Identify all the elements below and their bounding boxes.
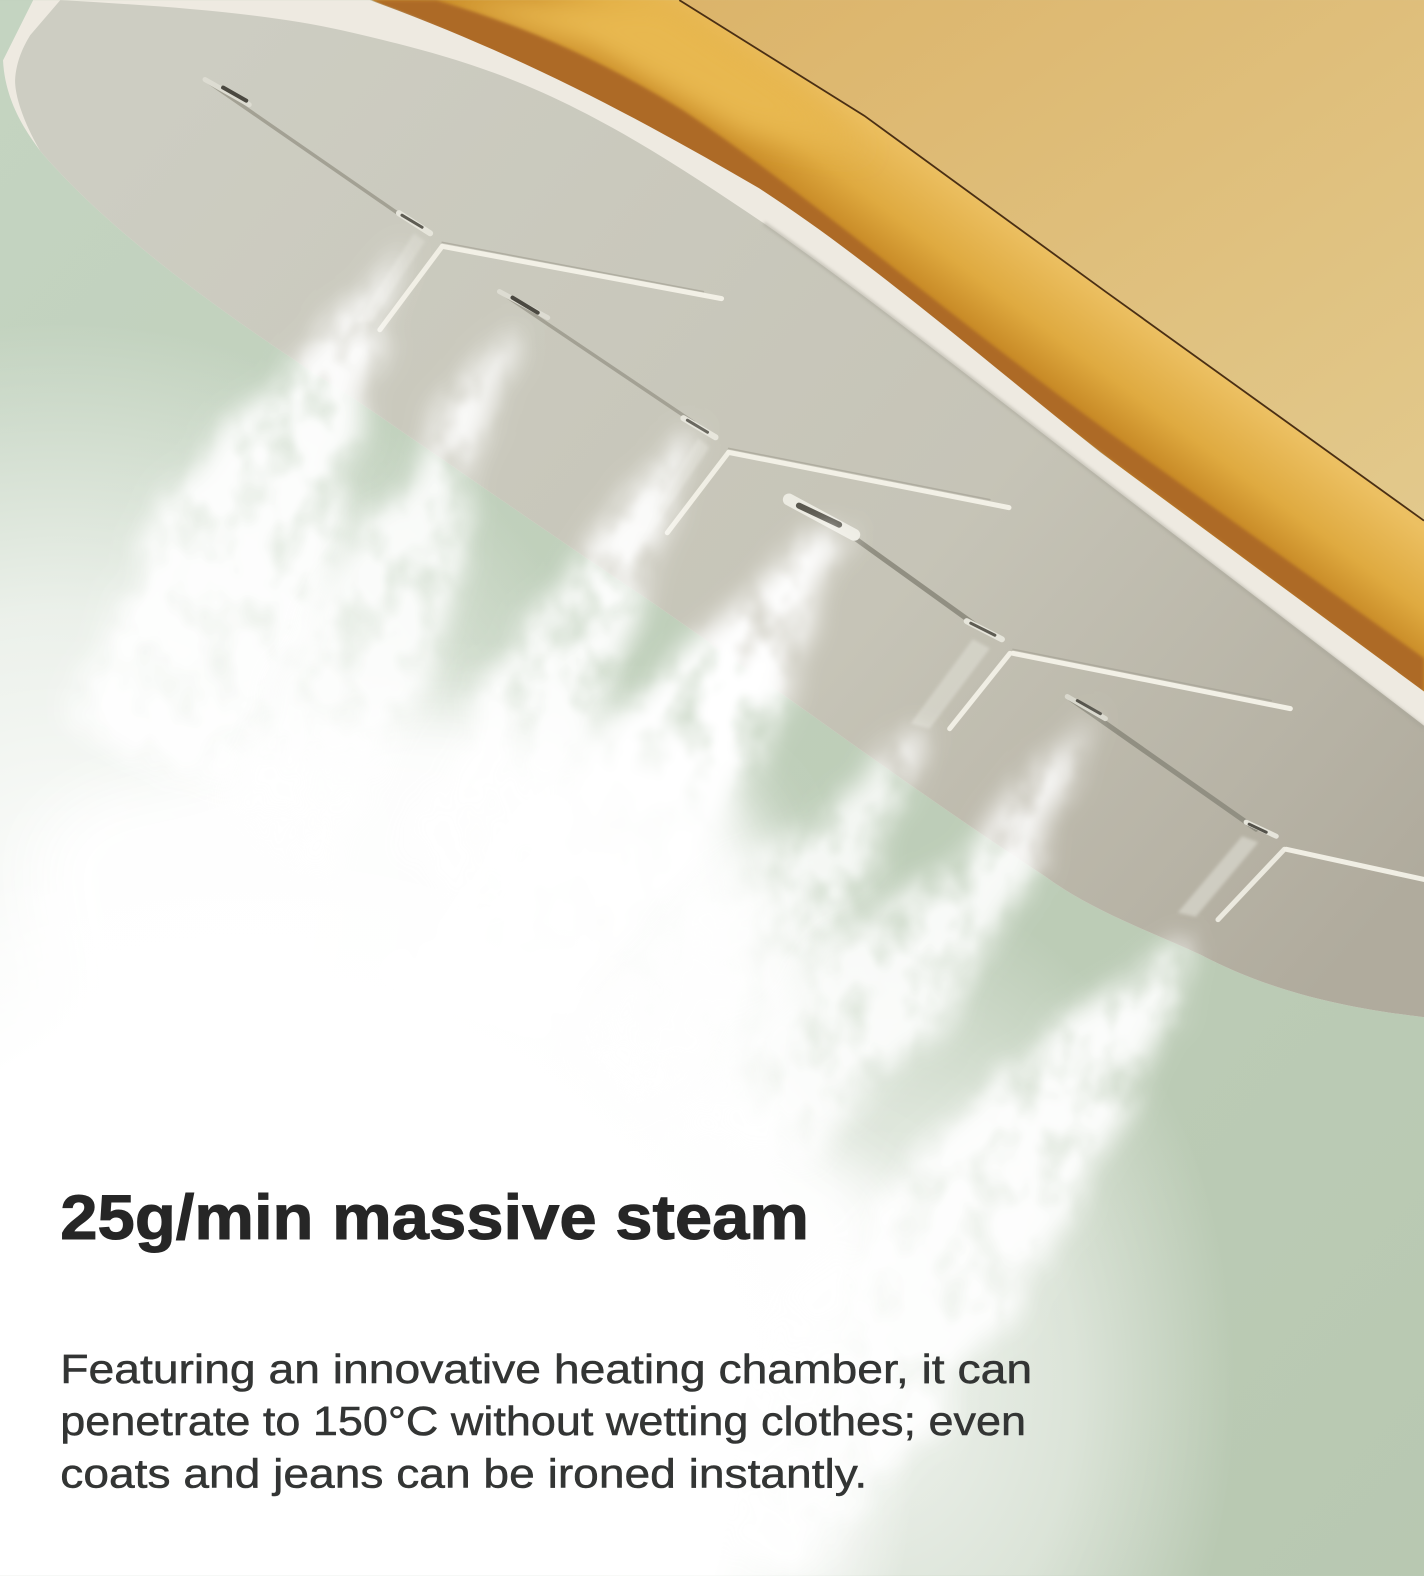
iron: soleplate with white rim (3, 0, 1424, 1017)
jet 6 (673, 714, 1095, 1176)
heading: 25g/min massive steam (60, 1183, 809, 1253)
yellow body restored above the seam (679, 0, 1424, 521)
brown underside (370, 0, 1424, 694)
jet 7 (633, 935, 1191, 1573)
slot group 3 (789, 500, 1290, 729)
dark seam line (679, 0, 1424, 521)
slot group 4 (1067, 697, 1424, 920)
lower steam mass (0, 834, 914, 1576)
right steam haze (533, 884, 1236, 1576)
description text: coats and jeans can be ironed instantly. (60, 1450, 867, 1496)
steam jets (60, 236, 1191, 1573)
slot group 2 (499, 292, 1009, 533)
jet 2 (221, 322, 521, 884)
iron: gold band (370, 0, 1424, 704)
central steam cloud (60, 724, 884, 1457)
iron: yellow body (679, 0, 1424, 521)
jet 5 (573, 734, 935, 1126)
jet 3 (392, 432, 698, 925)
gold highlight at top of band (432, 0, 864, 151)
description text: Featuring an innovative heating chamber, it can (60, 1346, 1032, 1392)
steam slots (205, 80, 1424, 920)
jet 1 (60, 236, 407, 804)
slot group 1 (205, 80, 722, 330)
description text: penetrate to 150°C without wetting clothes; even (60, 1398, 1026, 1444)
jet 4 (372, 528, 846, 1045)
rim shadow line (764, 223, 1424, 728)
description text (60, 1346, 1032, 1496)
left steam haze (0, 322, 663, 1487)
